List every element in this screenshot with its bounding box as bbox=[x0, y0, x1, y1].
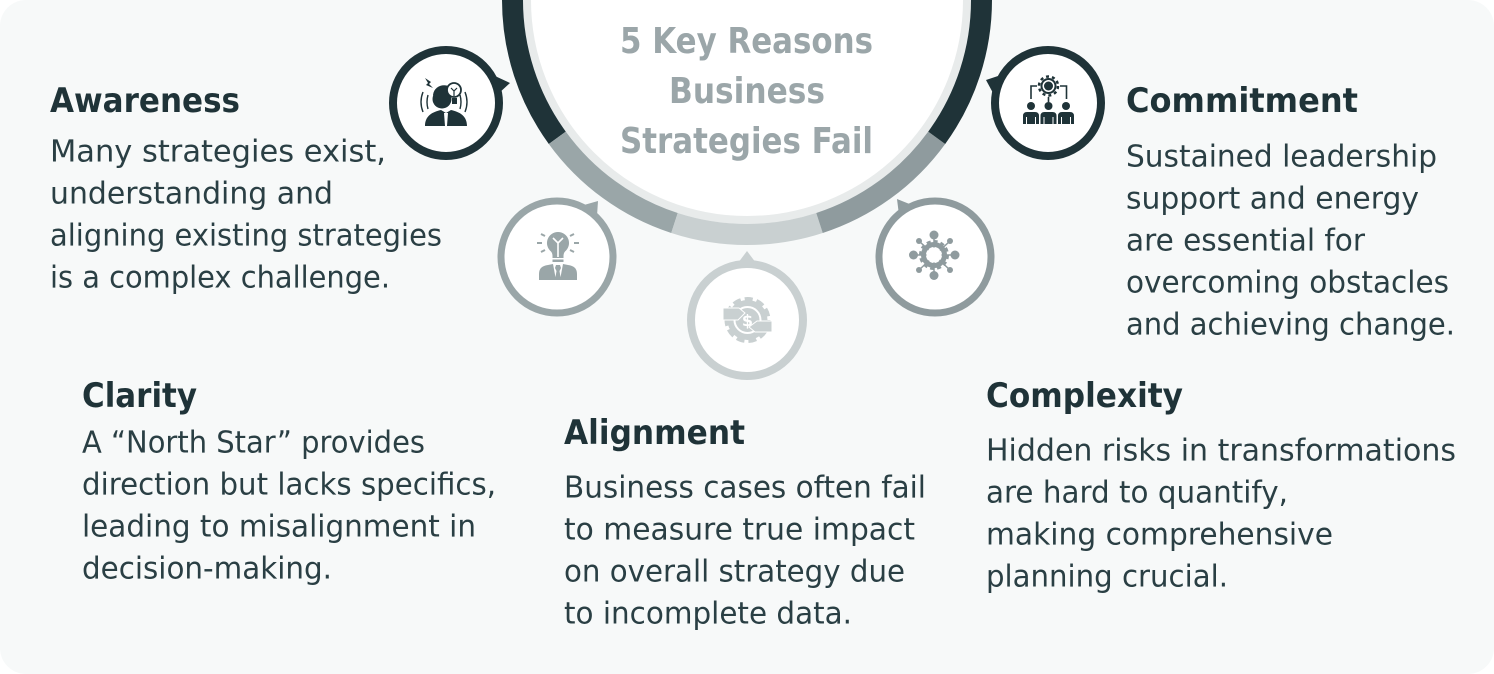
icon badge: awareness bbox=[393, 50, 510, 156]
heading: awareness: Awareness bbox=[50, 81, 240, 121]
text: complexity body: Hidden risks in transformations bbox=[986, 434, 1456, 468]
text: alignment body: to measure true impact bbox=[564, 512, 915, 548]
heading: alignment: Alignment bbox=[564, 413, 745, 453]
inner light ring bbox=[527, 0, 967, 220]
text: complexity body: making comprehensive bbox=[986, 518, 1333, 552]
icon badge: clarity bbox=[501, 201, 613, 313]
text: commitment body: Sustained leadership bbox=[1126, 140, 1437, 174]
text: clarity body: direction but lacks specifics, bbox=[82, 468, 496, 502]
text: commitment body: are essential for bbox=[1126, 224, 1365, 258]
icon: person with lightbulb bbox=[421, 78, 467, 126]
icon badge: alignment bbox=[691, 251, 803, 376]
text: awareness body: understanding and bbox=[50, 176, 333, 212]
ring segment: alignment bbox=[674, 223, 820, 234]
icon badge: complexity bbox=[879, 199, 991, 313]
ring segment: clarity bbox=[557, 138, 674, 223]
ring segment: awareness bbox=[512, 0, 557, 138]
heading: commitment: Commitment bbox=[1126, 81, 1358, 121]
text: awareness body bbox=[50, 134, 442, 296]
panel: commitment bbox=[1126, 81, 1455, 342]
panel: clarity bbox=[82, 376, 496, 586]
text: complexity body: are hard to quantify, bbox=[986, 476, 1288, 510]
text: complexity body: planning crucial. bbox=[986, 560, 1228, 594]
text: commitment body: overcoming obstacles bbox=[1126, 266, 1449, 300]
text: alignment body: on overall strategy due bbox=[564, 554, 905, 590]
icon badge: commitment bbox=[986, 50, 1101, 156]
title: 5 Key Reasons bbox=[620, 21, 873, 62]
icon: lightbulb head bbox=[537, 232, 579, 280]
icon: network lightbulb bbox=[909, 230, 960, 280]
text: awareness body: Many strategies exist, bbox=[50, 134, 386, 170]
icon: gear with handshake and dollar: $ bbox=[742, 311, 753, 330]
heading: complexity: Complexity bbox=[986, 376, 1183, 416]
text: awareness body: is a complex challenge. bbox=[50, 260, 390, 296]
ring segment: commitment bbox=[937, 0, 982, 138]
text: alignment body: Business cases often fail bbox=[564, 470, 926, 506]
title bbox=[620, 21, 873, 162]
text: clarity body: decision-making. bbox=[82, 552, 332, 586]
panel: awareness bbox=[50, 81, 442, 296]
text: complexity body bbox=[986, 434, 1456, 594]
text: awareness body: aligning existing strategies bbox=[50, 218, 442, 254]
ring segment: complexity bbox=[820, 138, 937, 223]
panel: alignment bbox=[564, 413, 926, 632]
text: commitment body: support and energy bbox=[1126, 182, 1419, 216]
icon: team with gear bbox=[1023, 76, 1074, 124]
text: clarity body bbox=[82, 426, 496, 586]
central segmented ring bbox=[512, 0, 982, 234]
text: commitment body bbox=[1126, 140, 1455, 342]
text: clarity body: leading to misalignment in bbox=[82, 510, 476, 544]
panel: complexity bbox=[986, 376, 1456, 594]
title: Business bbox=[669, 71, 825, 112]
text: commitment body: and achieving change. bbox=[1126, 308, 1455, 342]
text: alignment body: to incomplete data. bbox=[564, 596, 852, 632]
heading: clarity: Clarity bbox=[82, 376, 197, 416]
title: Strategies Fail bbox=[620, 121, 873, 162]
text: alignment body bbox=[564, 470, 926, 632]
text: clarity body: A “North Star” provides bbox=[82, 426, 425, 460]
